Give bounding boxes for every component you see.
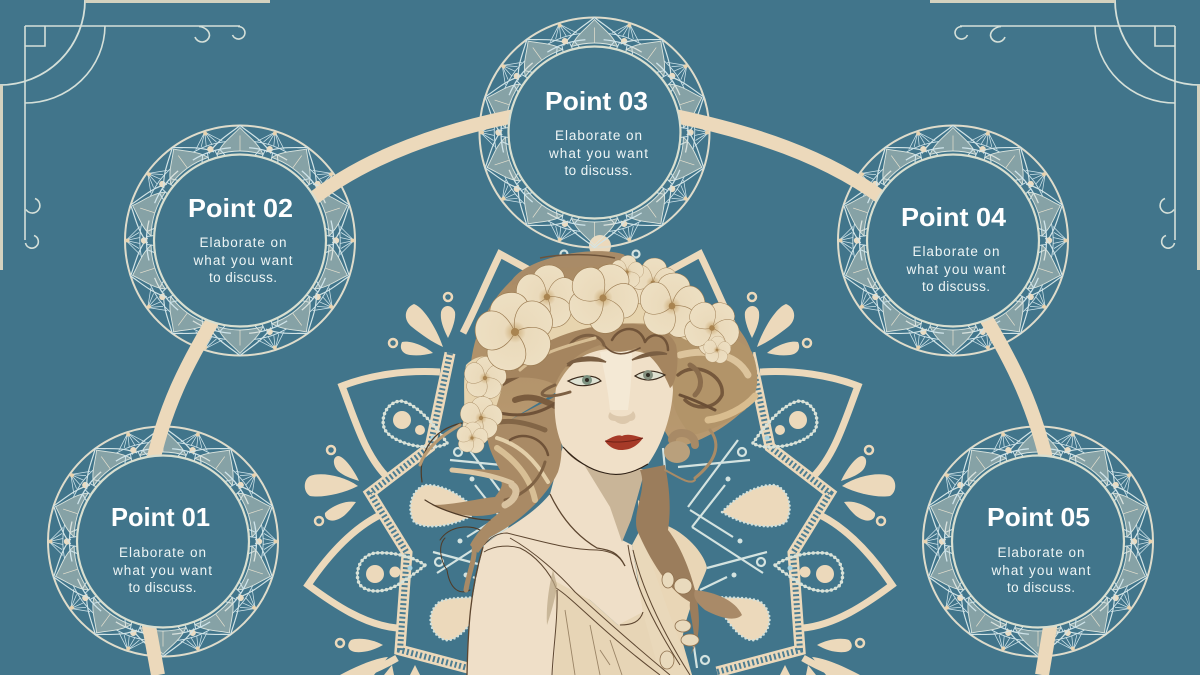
face: [555, 349, 673, 474]
neck shadow: [583, 463, 645, 542]
corner ornament: top left: [0, 0, 270, 270]
point 05 text: Elaborate on: [998, 545, 1084, 560]
point 04 text: to discuss.: [922, 279, 990, 294]
left curls mass: [432, 395, 562, 553]
soft brown shade on dress: [547, 570, 557, 625]
point 01 text: [111, 502, 212, 595]
point 04 text: Elaborate on: [912, 244, 1000, 259]
point 02 text: [188, 193, 293, 285]
right curls mass: [672, 335, 757, 435]
point 03 text: Elaborate on: [555, 128, 642, 143]
point 02 text: Point 02: [188, 193, 293, 223]
point 01 text: to discuss.: [128, 580, 196, 595]
point 03 text: to discuss.: [564, 163, 632, 178]
point 04 text: what you want: [906, 262, 1006, 277]
back hair: [470, 254, 756, 448]
point 05 text: Point 05: [987, 502, 1090, 532]
torso, neck and arm: [467, 446, 645, 675]
eyes, brows, nose and lips: [567, 352, 667, 450]
point 03 text: what you want: [548, 146, 648, 161]
point 02 text: what you want: [192, 253, 293, 268]
point 04 text: Point 04: [901, 202, 1007, 232]
mandala behind the portrait: [305, 235, 895, 675]
right falling hair: [636, 465, 699, 655]
point 05 text: [987, 502, 1091, 595]
portrait of woman with flower crown: [420, 251, 757, 675]
point 01 text: Point 01: [111, 502, 210, 532]
point 05 text: what you want: [990, 563, 1091, 578]
point 05 text: to discuss.: [1007, 580, 1075, 595]
point 03 text: [545, 86, 648, 178]
point 04 text: [901, 202, 1007, 294]
point 01 text: Elaborate on: [119, 545, 206, 560]
dress: [553, 580, 690, 675]
fringe of curls: [500, 320, 677, 388]
point 02 text: Elaborate on: [200, 235, 286, 250]
flower crown: [455, 251, 753, 456]
right lower strand and cream locks: [638, 500, 707, 675]
point 03 text: Point 03: [545, 86, 648, 116]
point 02 text: to discuss.: [209, 270, 277, 285]
dress fabric lines: [467, 446, 690, 675]
point 01 text: what you want: [112, 563, 212, 578]
corner ornament: top right: [930, 0, 1200, 270]
